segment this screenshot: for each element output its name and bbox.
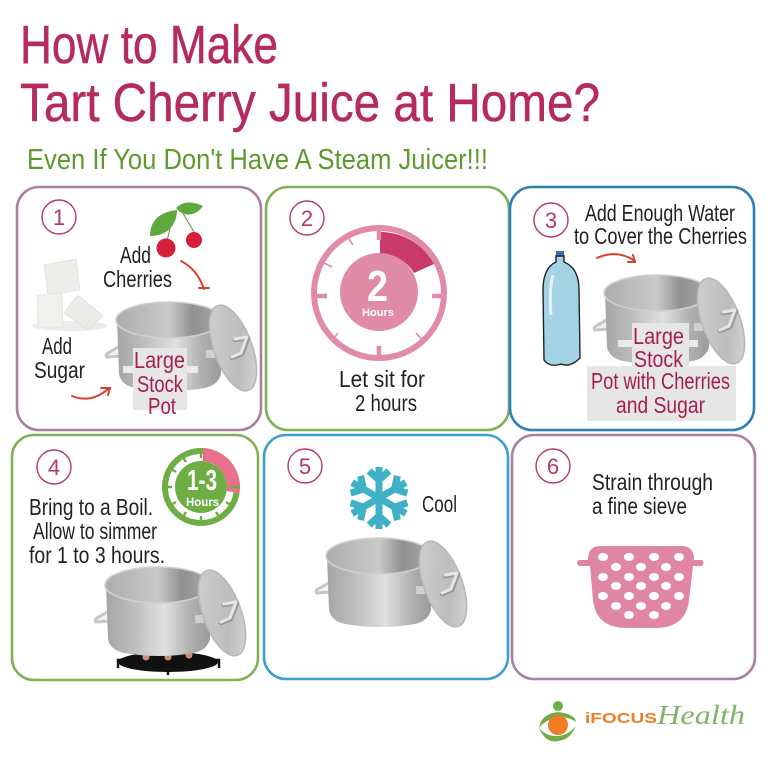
panel: step 3 add water	[510, 187, 754, 430]
label: add sugar	[34, 333, 85, 383]
step number 1	[42, 200, 76, 234]
panel: step 2 let sit	[266, 187, 509, 430]
pot	[95, 564, 255, 662]
pot	[316, 535, 476, 633]
icon: 1-3 hour badge: 1-3	[187, 465, 217, 497]
text: strain through a fine sieve: Strain through	[592, 469, 713, 495]
icon: snowflake	[347, 467, 411, 529]
step number 6: 6	[547, 454, 559, 479]
icon: burner	[118, 652, 219, 675]
label: add cherries: Add	[120, 242, 151, 268]
step number 3	[534, 203, 568, 237]
icon: 1-3 hour badge	[162, 448, 240, 526]
title	[20, 15, 600, 133]
text: bring to a boil: for 1 to 3 hours.	[29, 542, 165, 568]
text: bring to a boil: Bring to a Boil.	[29, 494, 153, 520]
step number 4: 4	[48, 455, 60, 480]
text: let sit for 2 hours: 2 hours	[355, 390, 417, 416]
label: large stock pot with cherries and sugar: Stock	[634, 346, 683, 372]
step number 5	[288, 449, 322, 483]
step number 2: 2	[301, 206, 313, 231]
label: large stock pot	[123, 347, 198, 419]
icon: logo figure	[539, 701, 576, 741]
icon: 2 hour clock: Hours	[362, 307, 394, 319]
step number 6	[536, 449, 570, 483]
step number 3: 3	[545, 208, 557, 233]
title: Tart Cherry Juice at Home?	[20, 73, 600, 133]
arrow: water to pot	[597, 254, 635, 262]
icon: 1-3 hour badge: Hours	[186, 495, 219, 509]
text: Health: Health	[656, 700, 745, 730]
label: large stock pot with cherries and sugar: and Sugar	[616, 392, 705, 418]
step number 2	[290, 201, 324, 235]
step number 4	[37, 450, 71, 484]
panel: step 4 boil	[12, 435, 258, 680]
label: large stock pot with cherries and sugar: Large	[633, 323, 684, 349]
pot	[106, 299, 266, 397]
step number 1: 1	[53, 205, 65, 230]
panel: step 5 cool	[264, 435, 508, 679]
logo: iFocus Health	[539, 700, 745, 741]
label: large stock pot with cherries and sugar: Pot with Cherries	[591, 368, 730, 394]
icon: colander	[577, 546, 704, 628]
step number 5: 5	[299, 454, 311, 479]
text: strain through a fine sieve: a fine sieve	[592, 493, 687, 519]
text: bring to a boil: Allow to simmer	[33, 518, 157, 544]
label: add cherries: Cherries	[103, 266, 172, 292]
panel: step 1 add cherries and sugar	[17, 187, 266, 430]
text: let sit for 2 hours	[339, 366, 425, 416]
arrow: sugar to pot	[72, 388, 110, 399]
icon: 2 hour clock	[314, 228, 444, 358]
pot	[594, 272, 754, 370]
label: large stock pot with cherries and sugar	[587, 323, 736, 421]
text: bring to a boil	[29, 494, 165, 568]
text: add enough water	[574, 200, 747, 249]
title: How to Make	[20, 15, 278, 75]
label: large stock pot: Pot	[148, 393, 176, 419]
icon: water bottle	[543, 251, 580, 365]
label: large stock pot: Large	[134, 347, 185, 373]
label: add sugar: Add	[42, 333, 72, 359]
panel: step 6 strain	[512, 435, 755, 679]
label: large stock pot: Stock	[137, 371, 183, 397]
label: add cherries	[103, 242, 172, 292]
text: iFocus: iFOCUS	[585, 710, 657, 727]
icon: sugar cubes	[32, 259, 108, 331]
icon: cherries	[150, 202, 203, 258]
label: add sugar: Sugar	[34, 357, 85, 383]
icon: 2 hour clock: 2	[367, 262, 388, 311]
text: cool: Cool	[422, 491, 457, 517]
text: strain through a fine sieve	[592, 469, 713, 519]
text: let sit for 2 hours: Let sit for	[339, 366, 425, 392]
arrow: cherries to pot	[181, 261, 209, 289]
subtitle: Even If You Don't Have A Steam Juicer!!!	[27, 144, 488, 176]
